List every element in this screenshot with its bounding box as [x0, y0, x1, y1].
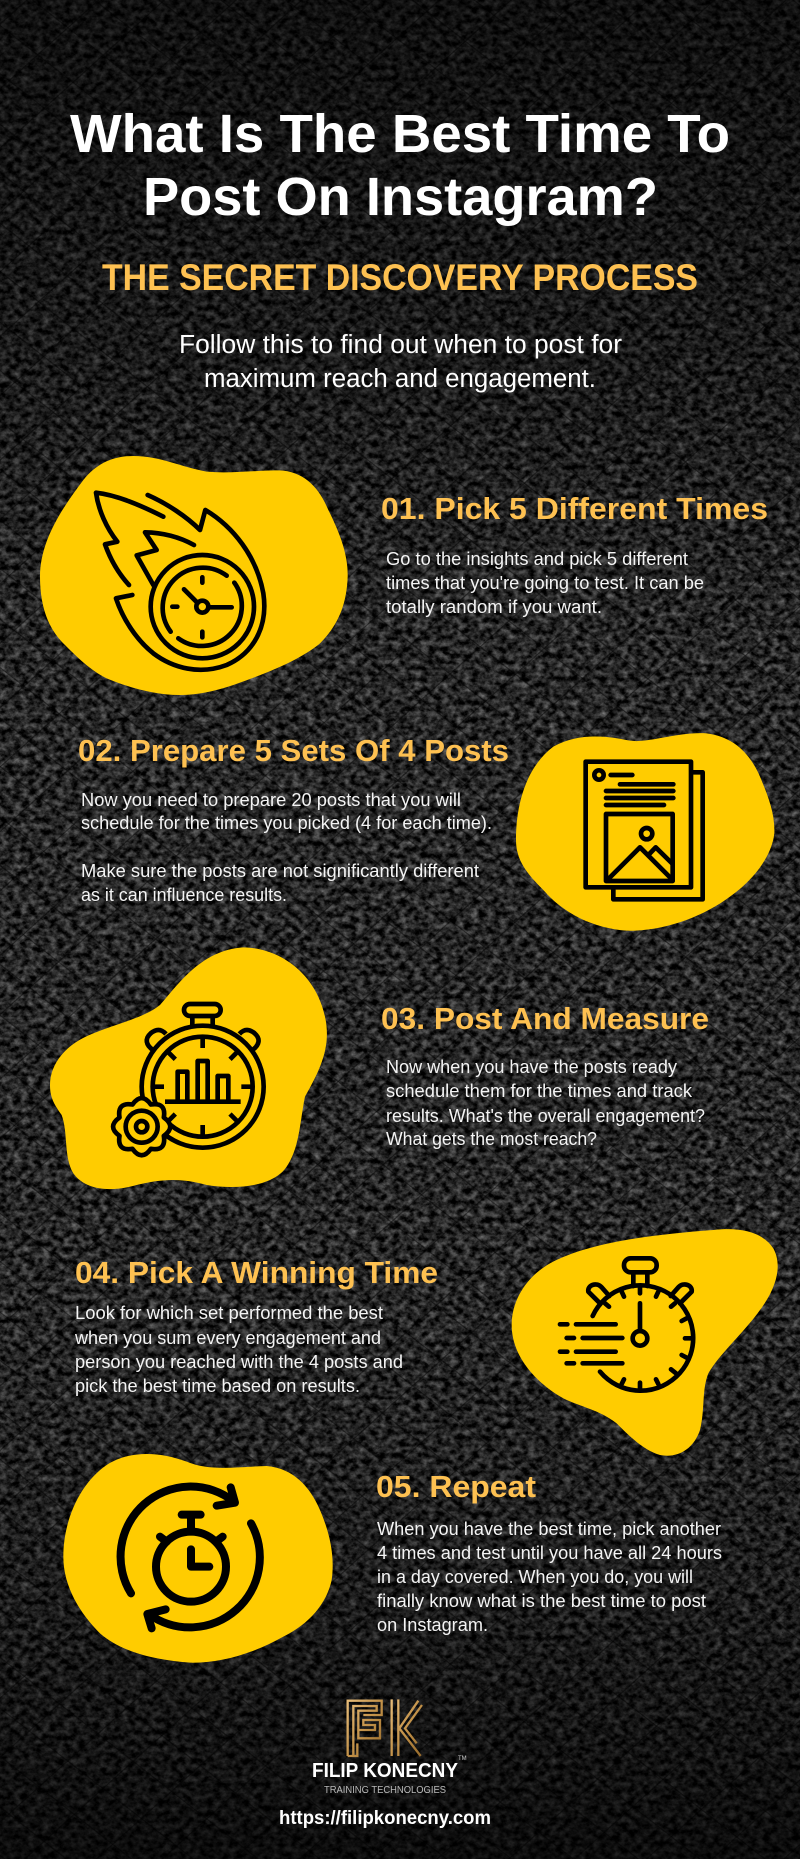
icon: fireball clock on yellow blob: [40, 456, 348, 695]
step 01 body: [386, 548, 704, 617]
intro text: [179, 331, 623, 393]
step 04 body: [74, 1302, 403, 1396]
title: What Is The Best Time To: [70, 104, 730, 164]
step 02 heading: 02. Prepare 5 Sets Of 4 Posts: [78, 733, 509, 768]
step 02 body: [81, 789, 492, 905]
step 02 panel: [78, 733, 774, 931]
step 03 body: Now when you have the posts ready: [386, 1056, 678, 1077]
step 04 body: Look for which set performed the best: [75, 1302, 383, 1323]
step 03 body: [386, 1056, 705, 1149]
intro text: Follow this to find out when to post for: [179, 331, 623, 359]
step 01 body: totally random if you want.: [386, 596, 602, 617]
step 04 body: pick the best time based on results.: [75, 1375, 360, 1396]
intro text: maximum reach and engagement.: [204, 365, 596, 393]
step 04 panel: [74, 1229, 778, 1456]
trademark: TM: [458, 1756, 467, 1762]
step 01 heading: 01. Pick 5 Different Times: [381, 491, 768, 526]
title: [70, 104, 730, 227]
step 05 body: When you have the best time, pick another: [377, 1518, 721, 1539]
step 03 body: What gets the most reach?: [386, 1128, 597, 1149]
step 02 body: as it can influence results.: [81, 884, 287, 905]
step 05 body: 4 times and test until you have all 24 hours: [377, 1542, 722, 1563]
step 03 heading: 03. Post And Measure: [381, 1001, 709, 1036]
step 04 body: person you reached with the 4 posts and: [75, 1351, 403, 1372]
icon: repeating stopwatch on yellow blob: [63, 1454, 333, 1663]
step 04 heading: 04. Pick A Winning Time: [75, 1255, 438, 1290]
step 03 panel: [50, 947, 709, 1189]
logo tagline: TRAINING TECHNOLOGIES: [324, 1784, 446, 1796]
step 05 body: [377, 1518, 722, 1635]
step 02 body: Make sure the posts are not significantly different: [81, 860, 479, 881]
step 05 panel: [63, 1454, 722, 1663]
title: Post On Instagram?: [143, 167, 658, 227]
icon: post pages on yellow blob: [516, 733, 774, 931]
logo name: FILIP KONECNY: [312, 1760, 459, 1782]
logo: [312, 1699, 467, 1796]
step 05 body: finally know what is the best time to post: [377, 1590, 706, 1611]
step 02 body: schedule for the times you picked (4 for each time).: [81, 812, 492, 833]
step 01 body: Go to the insights and pick 5 different: [386, 548, 688, 569]
step 05 body: on Instagram.: [377, 1614, 488, 1635]
icon: stopwatch with chart and gear on yellow blob: [50, 947, 327, 1189]
step 05 body: in a day covered. When you do, you will: [377, 1566, 693, 1587]
subtitle: THE SECRET DISCOVERY PROCESS: [102, 257, 698, 298]
step 04 body: when you sum every engagement and: [74, 1327, 381, 1348]
step 05 heading: 05. Repeat: [376, 1469, 536, 1504]
logo mark: FK monogram: [348, 1699, 422, 1756]
step 03 body: results. What's the overall engagement?: [386, 1105, 705, 1126]
step 01 panel: [40, 456, 768, 695]
icon: fast stopwatch on yellow blob: [512, 1229, 778, 1456]
website url: https://filipkonecny.com: [279, 1808, 491, 1829]
step 01 body: times that you're going to test. It can be: [386, 572, 704, 593]
step 02 body: Now you need to prepare 20 posts that you will: [81, 789, 461, 810]
step 03 body: schedule them for the times and track: [386, 1080, 693, 1101]
